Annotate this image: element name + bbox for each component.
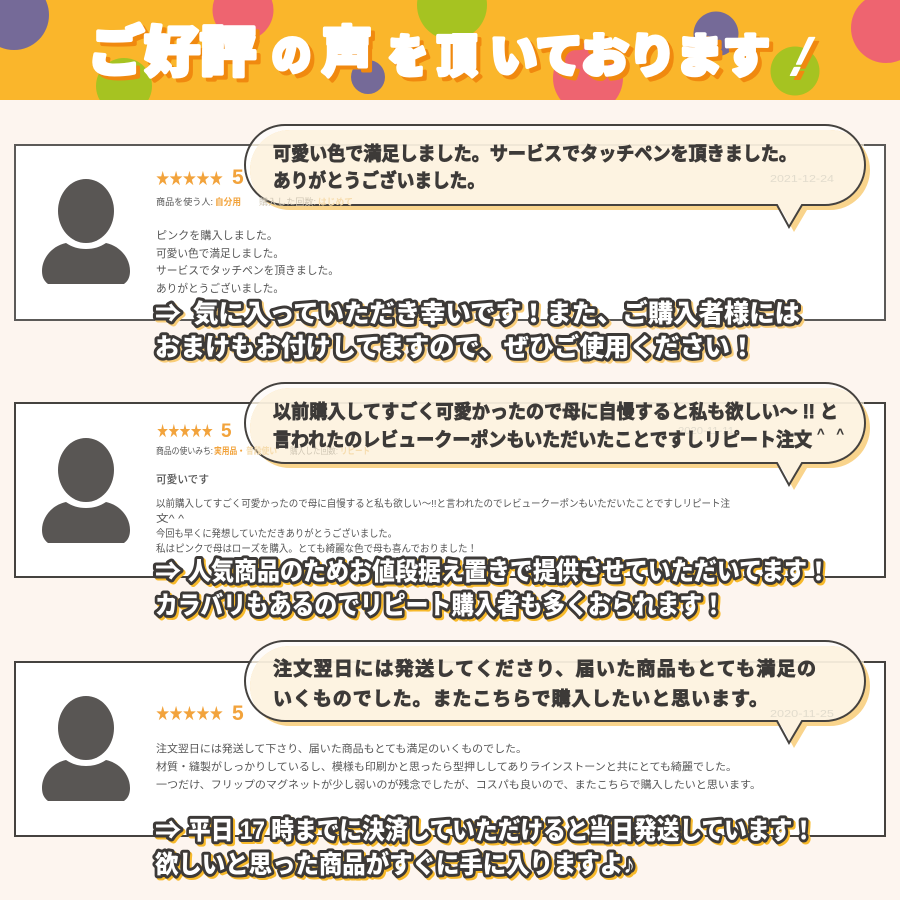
faint meta seen through bubble 1: 購入した回数:	[259, 196, 316, 207]
faint meta seen through bubble 1: はじめて	[318, 197, 353, 207]
reply 2: カラバリもあるのでリピート購入者も多くおられます！	[155, 592, 725, 620]
faint meta seen through bubble 2: リピート	[340, 446, 370, 456]
faint meta seen through bubble 2: 普段使い	[246, 445, 277, 456]
header banner	[0, 0, 900, 100]
review body 3: 注文翌日には発送して下さり、届いた商品もとても満足のいくものでした。	[156, 742, 527, 755]
panel: review 2	[15, 403, 885, 577]
review meta 1	[156, 196, 241, 207]
reply 2: 人気商品のためお値段据え置きで提供させていただいてます！	[188, 557, 830, 586]
bubble text 1	[273, 143, 797, 192]
icon: user avatar 2	[42, 438, 130, 543]
speech bubble 3	[245, 641, 870, 748]
bubble text 1: ありがとうございました。	[273, 169, 485, 192]
review meta 2	[156, 445, 245, 456]
review meta 2: 商品の使いみち:	[156, 445, 213, 456]
title: の	[272, 32, 311, 79]
reply 2: ⇒	[155, 558, 181, 586]
title: いております	[490, 30, 770, 82]
star rating 1: ★★★★★	[156, 171, 223, 188]
reply 1: 気に入っていただき幸いです！また、ご購入者様には	[193, 299, 800, 328]
star rating 2: 5	[221, 421, 232, 442]
reply 3	[155, 817, 815, 879]
review body 1: サービスでタッチペンを頂きました。	[156, 264, 339, 277]
review body 2	[156, 497, 730, 555]
star rating 3: ★★★★★	[156, 706, 223, 723]
review body 3	[156, 742, 761, 791]
star rating 2: ★★★★★	[157, 423, 213, 440]
review body 2: 今回も早くに発想していただきありがとうございました。	[156, 527, 397, 540]
panel: review 3	[15, 662, 885, 836]
review body 1: ピンクを購入しました。	[156, 228, 278, 242]
review meta 2: 実用品・	[214, 445, 245, 456]
bubble text 3	[273, 658, 816, 710]
review body 3: 一つだけ、フリップのマグネットが少し弱いのが残念でしたが、コスパも良いので、またこちらで購入したいと思います。	[156, 778, 761, 791]
date 2: 2020-11-11	[678, 426, 734, 437]
review body 1: 可愛い色で満足しました。	[156, 247, 284, 260]
star rating 3	[156, 702, 244, 725]
bubble text 3: 注文翌日には発送してくださり、届いた商品もとても満足の	[273, 658, 816, 680]
icon: user avatar 1	[42, 179, 130, 284]
star rating 1	[156, 166, 244, 189]
bubble text 2: 以前購入してすごく可愛かったので母に自慢すると私も欲しい～ !! と	[273, 400, 838, 423]
review body 1: ありがとうございました。	[156, 281, 284, 295]
icon: user avatar 3	[42, 696, 130, 801]
review body 2: 以前購入してすごく可愛かったので母に自慢すると私も欲しい～!!と言われたのでレビュークーポンもいただいたことですしリピート注	[156, 497, 730, 510]
reply 1	[155, 299, 800, 362]
review body 2: 私はピンクで母はローズを購入。とても綺麗な色で母も喜んでおりました！	[156, 542, 477, 555]
review body 3: 材質・縫製がしっかりしているし、模様も印刷かと思ったら型押ししてありラインストーンと共にとても綺麗でした。	[156, 760, 737, 773]
bubble text 3: いくものでした。またこちらで購入したいと思います。	[273, 688, 768, 710]
reply 3: ⇒	[155, 817, 181, 845]
faint meta seen through bubble 1	[259, 196, 353, 207]
bubble text 1: 可愛い色で満足しました。サービスでタッチペンを頂きました。	[273, 143, 797, 165]
bubble text 2	[273, 400, 844, 451]
review meta 1: 商品を使う人:	[156, 196, 213, 207]
star rating 3: 5	[232, 702, 244, 725]
speech bubble 1	[245, 125, 870, 232]
bubble text 2: ^ ^	[817, 426, 844, 441]
reply 3: 平日 17 時までに決済していただけると当日発送しています！	[188, 817, 815, 845]
panel: review 1	[15, 145, 885, 320]
title: 頂	[437, 31, 477, 82]
title: を	[388, 31, 428, 82]
faint meta seen through bubble 2	[246, 445, 370, 456]
review meta 1: 自分用	[215, 196, 241, 207]
reply 1: ⇒	[155, 300, 181, 328]
review body 2: 文^ ^	[156, 512, 184, 525]
title: 声	[322, 23, 372, 83]
title: ご好評	[88, 22, 256, 83]
star rating 1: 5	[232, 166, 244, 189]
review heading 2: 可愛いです	[156, 472, 209, 486]
reply 2	[155, 557, 830, 620]
date 3: 2020-11-25	[770, 709, 835, 720]
bubble text 2: 言われたのレビュークーポンもいただいたことですしリピート注文	[273, 428, 812, 451]
faint meta seen through bubble 2: 購入した回数:	[290, 445, 338, 456]
speech bubble 2	[245, 383, 870, 490]
title: !	[781, 27, 824, 87]
reply 1: おまけもお付けしてますので、ぜひご使用ください！	[155, 333, 755, 362]
reply 3: 欲しいと思った商品がすぐに手に入りますよ♪	[155, 850, 635, 879]
date 1: 2021-12-24	[770, 174, 835, 185]
review body 1	[156, 228, 339, 295]
title	[88, 22, 824, 87]
